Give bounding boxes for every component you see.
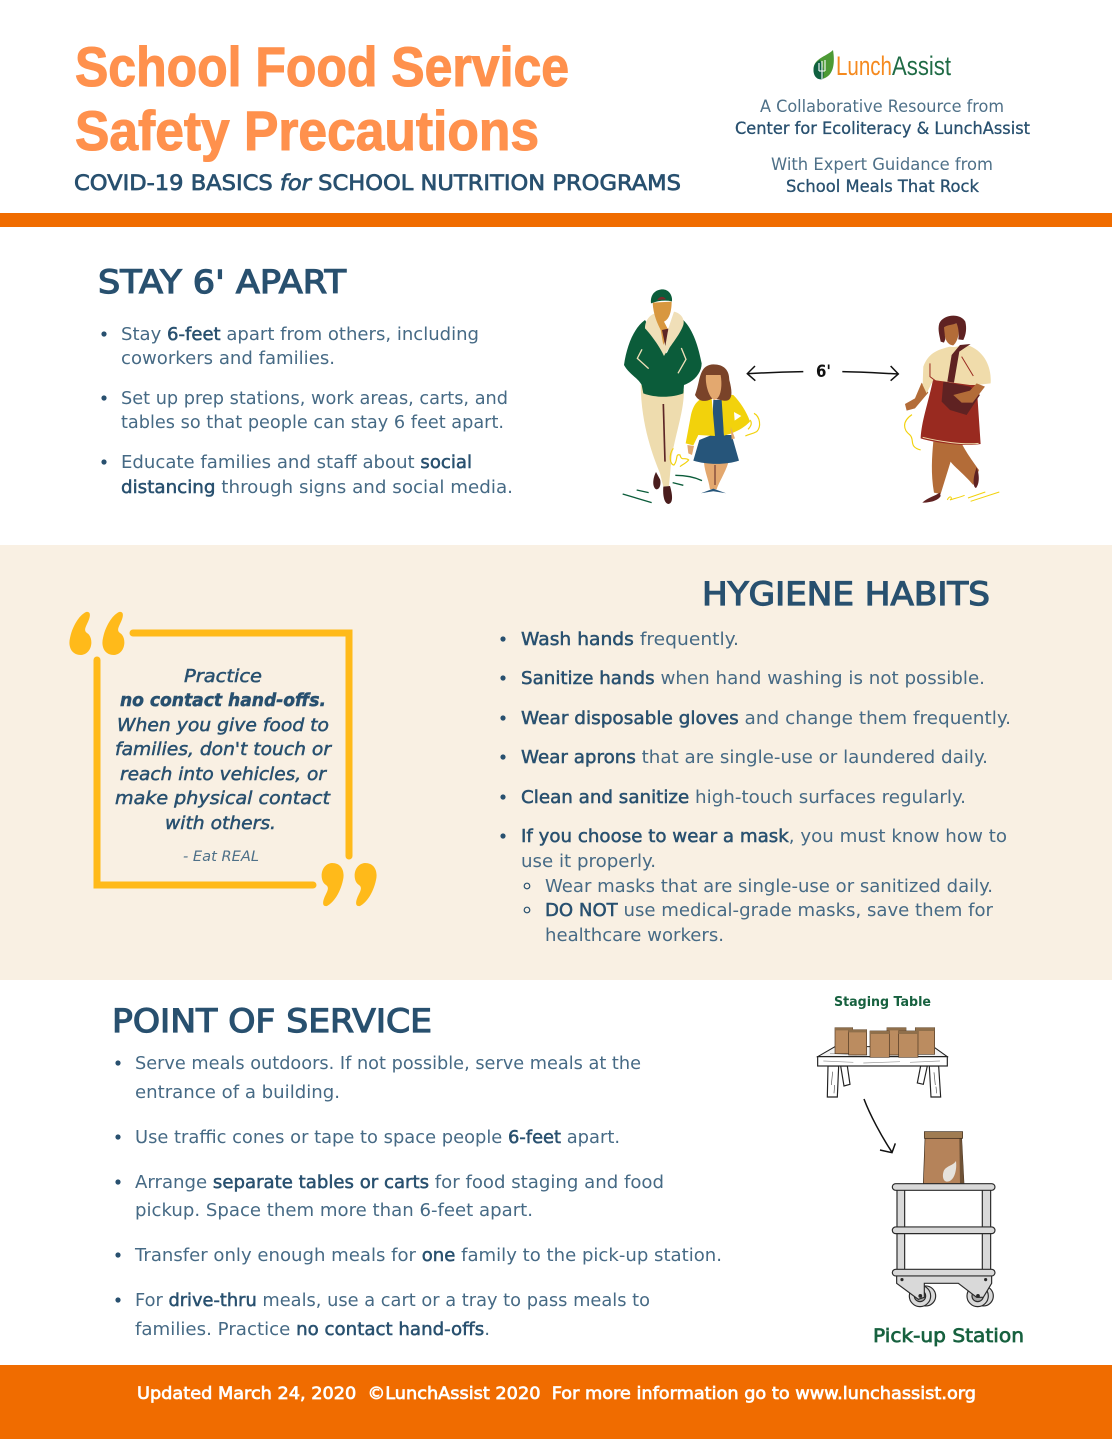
quote text: reach into vehicles, or [120,764,328,785]
credit: collaborative resource: Center for Ecoliteracy & LunchAssist [735,119,1031,138]
quote attribution: - Eat REAL [183,849,259,865]
quote frame [97,633,349,885]
logo wordmark: Assist [892,51,951,81]
icon: opening quote marks [69,612,124,655]
bullet list: service: Use traffic cones or tape to space people 6-feet apart. [135,1127,620,1148]
bullet list: service: pickup. Space them more than 6-feet apart. [135,1200,533,1221]
header right: logo and credits [735,50,1031,196]
bullet list: hygiene: Wash hands frequently. [521,629,739,650]
arrow: six feet [747,366,898,381]
meal bag [923,1132,964,1184]
logo wordmark: Lunch [836,51,892,81]
footer [0,1365,1112,1439]
quote text: families, don't touch or [115,739,333,760]
heading: point of service: POINT OF SERVICE [112,1002,432,1040]
bullet list: hygiene: Clean and sanitize high-touch surfaces regularly. [521,787,966,808]
quote text: When you give food to [117,715,329,736]
quote text: make physical contact [115,788,331,809]
heading: hygiene habits: HYGIENE HABITS [702,575,990,613]
bullet list: hygiene: Wear masks that are single-use or sanitized daily. [545,876,993,897]
panel: hygiene habits [500,575,1011,946]
bullet list: hygiene: healthcare workers. [545,925,724,946]
label: staging table: Staging Table [834,995,931,1010]
staging table [818,1028,947,1097]
orange header bar [0,213,1112,227]
bullet list: service: For drive-thru meals, use a cart or a tray to pass meals to [135,1290,650,1311]
heading: stay 6' apart: STAY 6' APART [98,263,346,301]
credit: expert guidance: School Meals That Rock [786,177,979,196]
quote text: Practice [184,666,262,687]
credit: collaborative resource: A Collaborative Resource from [760,97,1004,116]
credit: collaborative resource [735,97,1031,138]
quote text: no contact hand-offs. [120,690,326,711]
bullet list: hygiene: Wear disposable gloves and change them frequently. [521,708,1011,729]
bullet list: distancing: tables so that people can stay 6 feet apart. [121,412,504,433]
bullet list: distancing: distancing through signs and social media. [121,477,513,498]
woman with bag [905,316,999,503]
bullet list: service: Serve meals outdoors. If not possible, serve meals at the [135,1053,641,1074]
credit: expert guidance: With Expert Guidance from [771,155,993,174]
arrow: table to cart [864,1099,895,1153]
label: pick-up station: Pick-up Station [873,1325,1024,1347]
bullet list: distancing: coworkers and families. [121,348,335,369]
bullet list: service: Transfer only enough meals for one family to the pick-up station. [134,1245,722,1266]
bullet list: hygiene: If you choose to wear a mask, you must know how to [521,826,1007,847]
icon: LunchAssist leaf logo [813,50,834,79]
quote text: with others. [165,813,276,834]
footer text: Updated March 24, 2020 ©LunchAssist 2020 For more information go to www.lunchassist.org [137,1384,976,1404]
bullet list: hygiene: Wear aprons that are single-use or laundered daily. [521,747,988,768]
bullet list: distancing: Educate families and staff about social [121,452,472,473]
subtitle: COVID-19 BASICS for SCHOOL NUTRITION PROGRAMS [74,171,681,195]
logo wordmark [836,51,951,81]
bullet list: hygiene: DO NOT use medical-grade masks, save them for [545,900,994,921]
panel: hygiene band [0,545,1112,980]
panel: stay 6 feet apart [98,263,999,504]
label: 6 feet: 6' [816,362,831,382]
quote text [115,666,333,834]
title: School Food Service [75,35,569,98]
man walking [623,289,702,504]
bullet list: distancing: Set up prep stations, work areas, carts, and [121,388,508,409]
illustration: people six feet apart [623,289,999,504]
title: Safety Precautions [75,99,539,162]
bullet list: hygiene: use it properly. [521,851,656,872]
credit: expert guidance [771,155,993,196]
bullet list: distancing [101,324,513,498]
pick-up cart [892,1184,995,1307]
icon: closing quote marks [322,863,377,906]
bullet list: service [115,1053,722,1340]
bullet list: service: Arrange separate tables or carts for food staging and food [135,1172,664,1193]
child in yellow jacket [686,364,760,493]
bullet list: service: entrance of a building. [135,1082,340,1103]
title [75,35,569,162]
bullet list: service: families. Practice no contact hand-offs. [135,1319,490,1340]
bullet list: hygiene [500,629,1011,946]
callout: quote box [69,612,377,906]
illustration: staging table and pick-up cart [818,995,1024,1347]
bullet list: distancing: Stay 6-feet apart from others, including [121,324,479,345]
bullet list: hygiene: Sanitize hands when hand washing is not possible. [521,668,985,689]
panel: point of service [112,1002,722,1340]
